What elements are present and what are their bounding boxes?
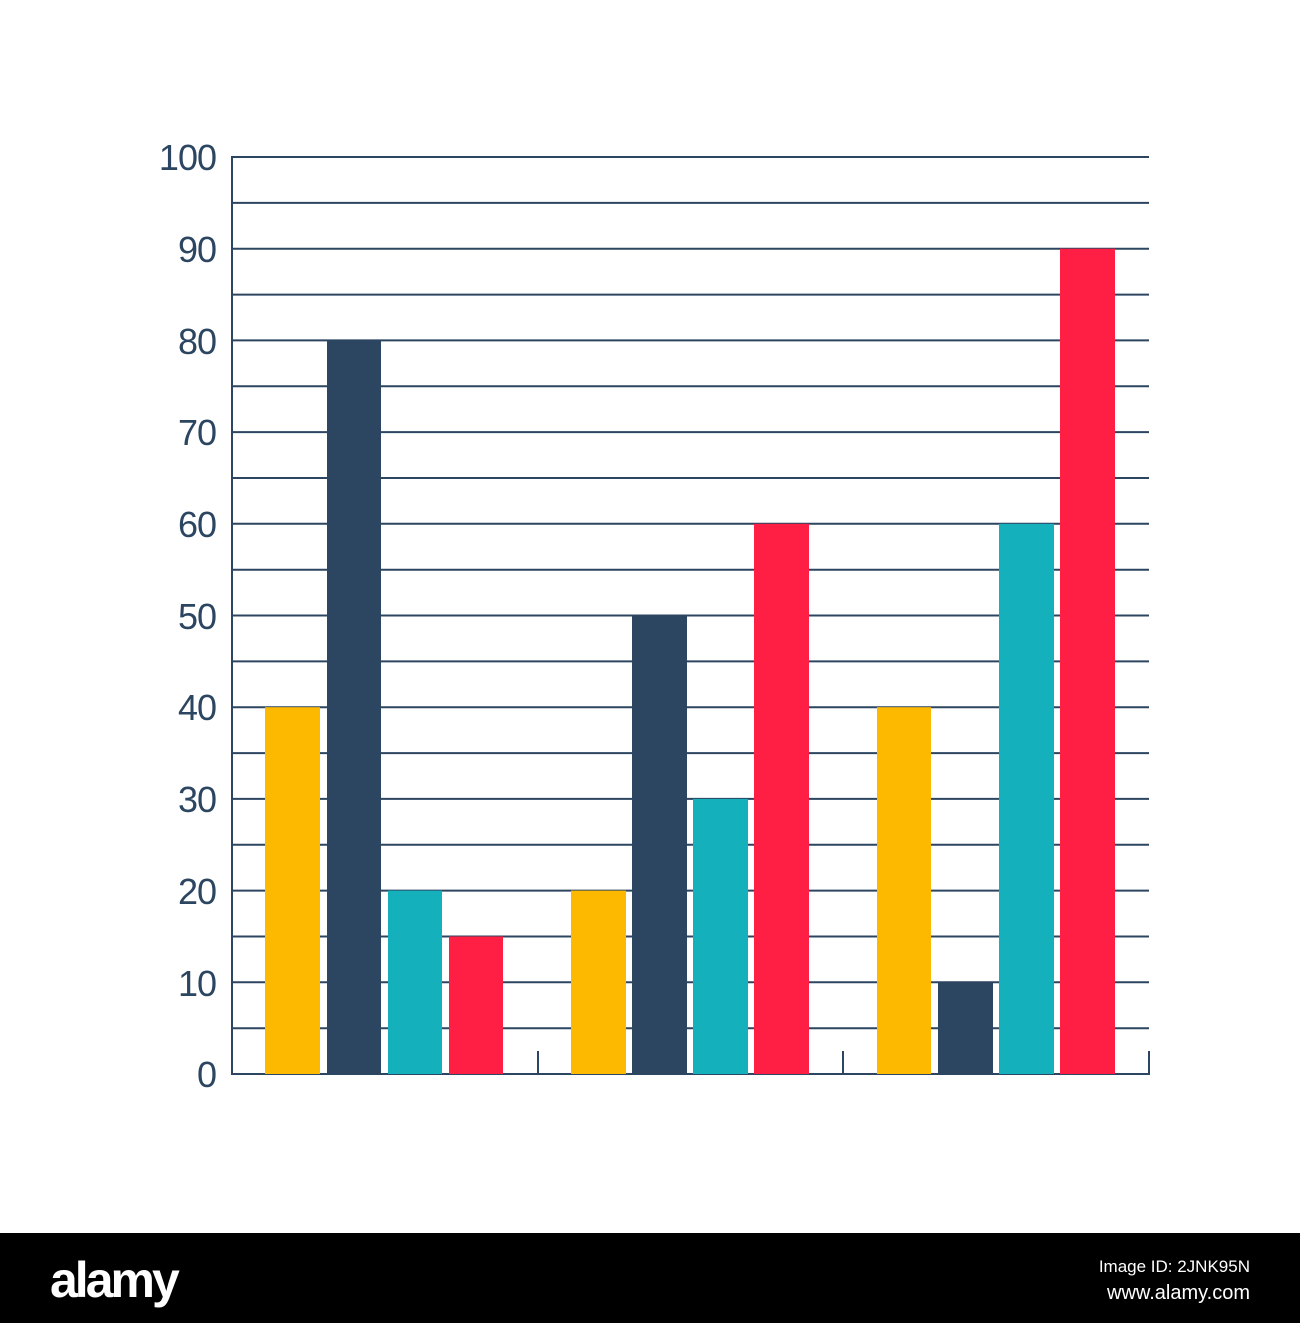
y-axis labels: 40: [178, 687, 216, 728]
y-axis labels: 90: [178, 229, 216, 270]
y-axis labels: 0: [197, 1054, 216, 1095]
bars group 2: [571, 524, 809, 1074]
y-axis labels: 50: [178, 596, 216, 637]
y-axis labels: 80: [178, 321, 216, 362]
footer bar: alamy: [50, 1252, 180, 1308]
y-axis labels: 70: [178, 412, 216, 453]
bars group 3: [877, 249, 1115, 1074]
footer bar: www.alamy.com: [1106, 1282, 1250, 1304]
y-axis labels: 10: [178, 963, 216, 1004]
y-axis labels: [159, 137, 216, 1095]
axes: [231, 156, 1150, 1075]
y-axis labels: 100: [159, 137, 216, 178]
footer bar: Image ID: 2JNK95N: [1099, 1257, 1250, 1276]
y-axis labels: 20: [178, 871, 216, 912]
bars group 1: [265, 340, 503, 1074]
y-axis labels: 60: [178, 504, 216, 545]
y-axis labels: 30: [178, 779, 216, 820]
footer bar: [0, 1233, 1300, 1323]
